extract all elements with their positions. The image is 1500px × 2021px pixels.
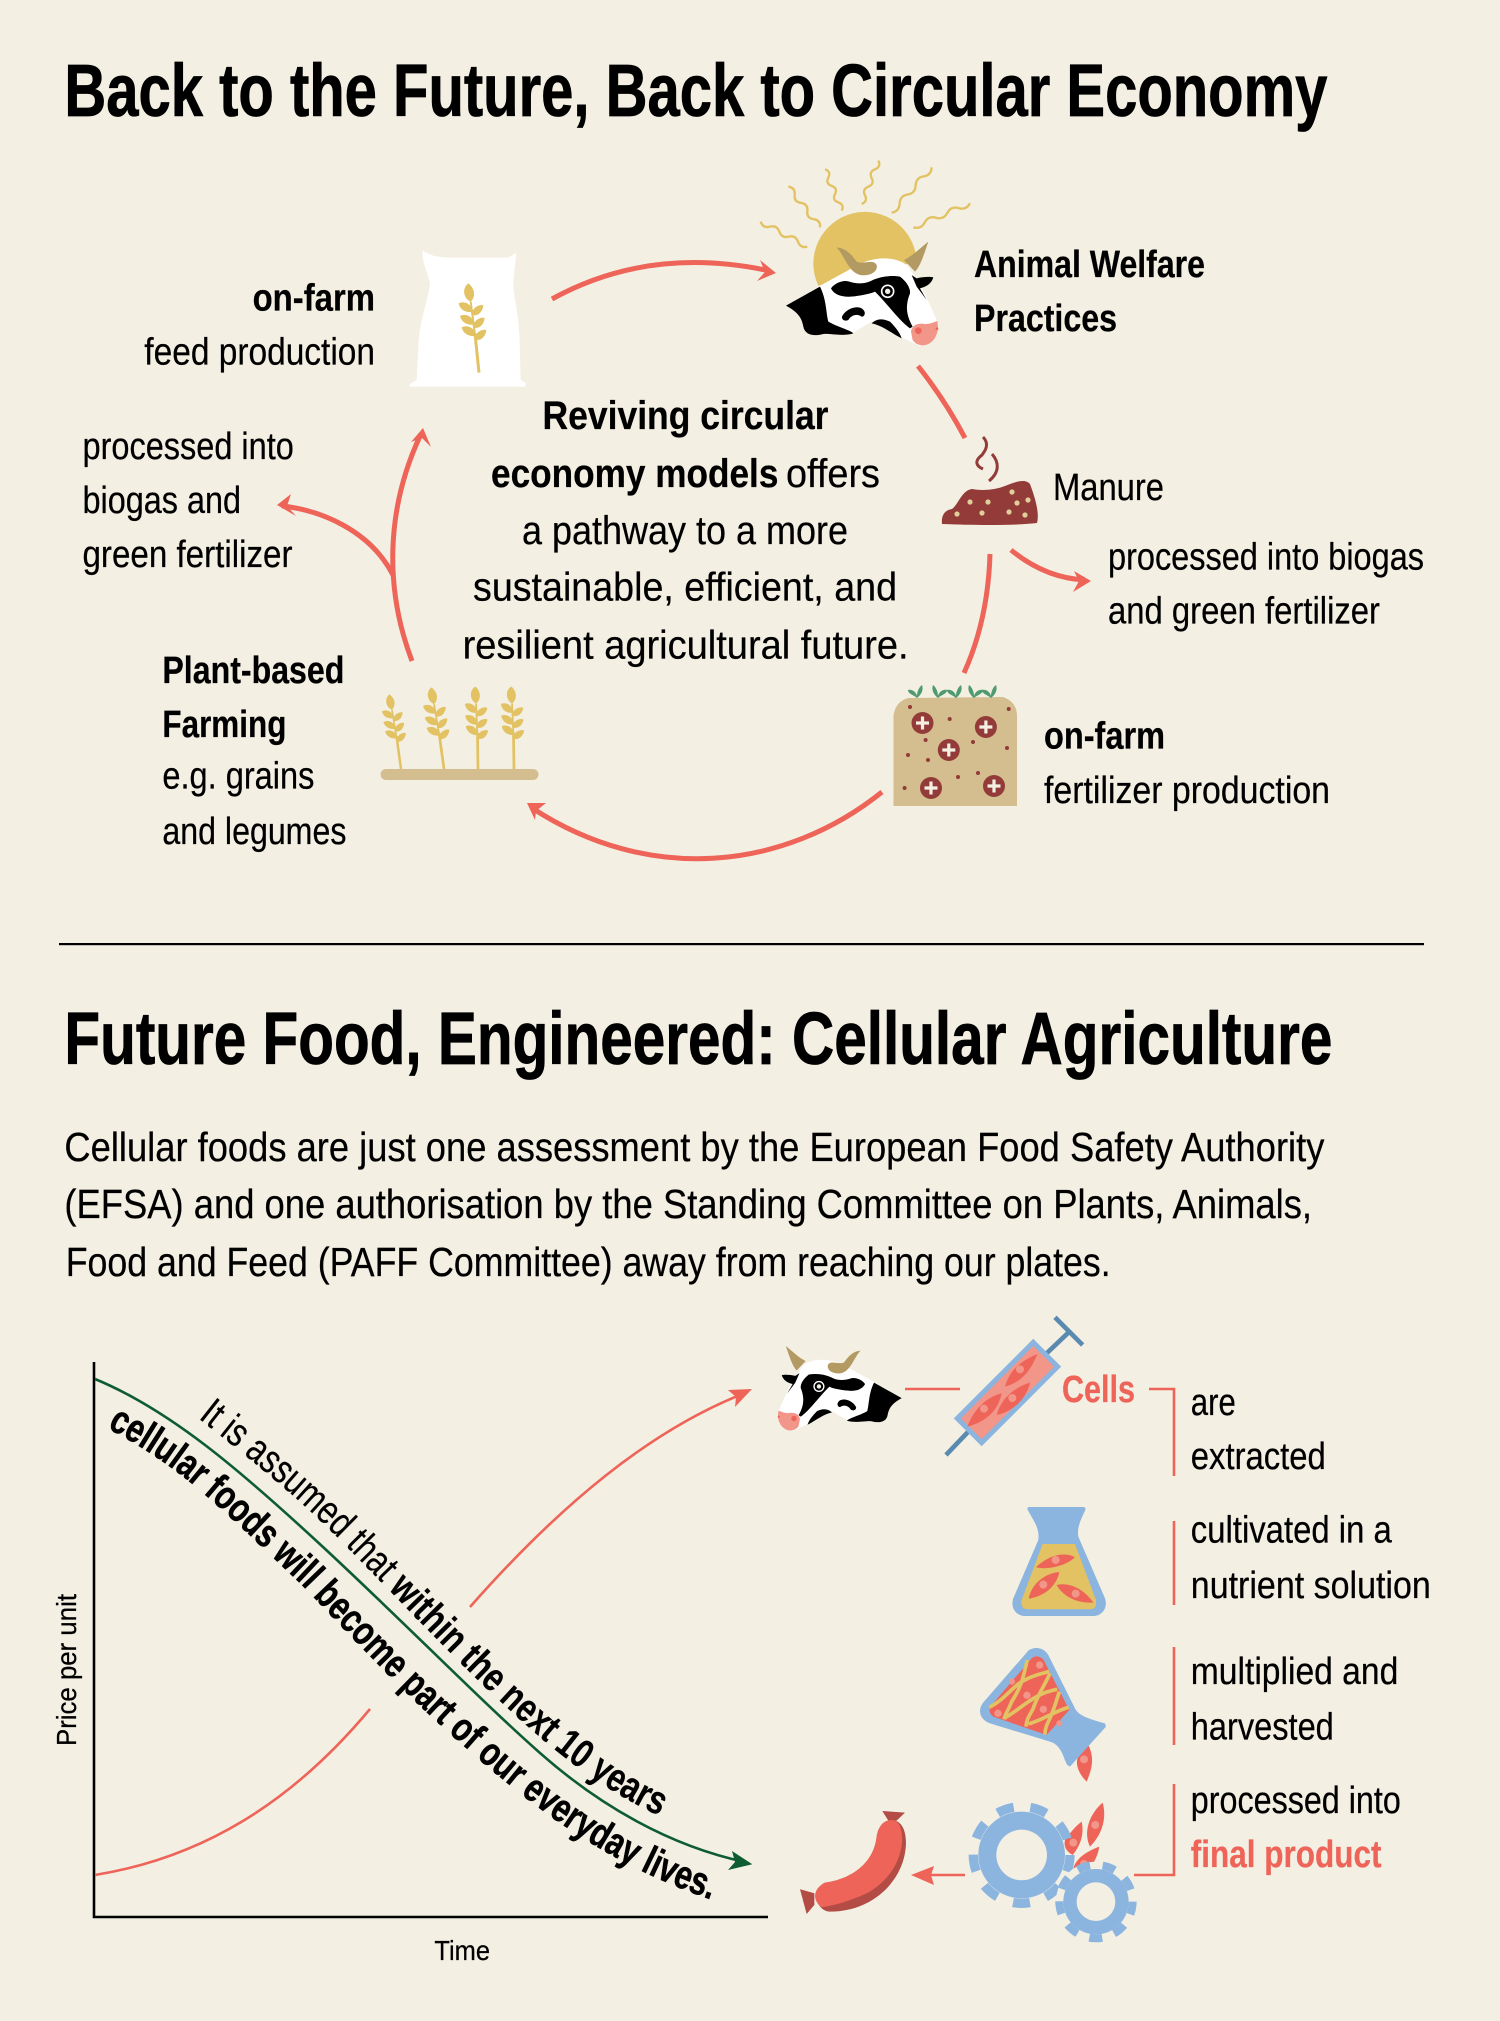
text: processed into biogas and green fertilizer (right) — [1108, 537, 1424, 633]
icon: sausage — [800, 1811, 906, 1914]
icon: tipped flask pouring cells — [980, 1648, 1106, 1782]
icon: syringe with cells — [946, 1317, 1083, 1455]
text: plant-based farming: and legumes — [162, 811, 346, 853]
arrow: manure to biogas — [1011, 550, 1091, 592]
icon: feed sack with wheat — [409, 251, 526, 387]
arrow: sack to cow — [552, 260, 776, 299]
text: animal welfare practices: Practices — [974, 298, 1117, 340]
curve: rising red — [95, 1389, 752, 1875]
text: processed into final product: processed into — [1191, 1780, 1401, 1822]
icon: wheat field — [380, 686, 538, 780]
connector: cow to syringe — [905, 1388, 960, 1390]
arrow: plants to sack — [393, 428, 431, 661]
y axis label: Price per unit — [51, 1594, 82, 1746]
text: plant-based farming: e.g. grains — [162, 756, 314, 798]
panel: circular economy — [64, 49, 1424, 859]
text: processed into biogas and green fertilizer (left): processed into — [82, 426, 294, 468]
bracket: cells extracted — [1149, 1389, 1174, 1476]
text: central message: offers — [786, 452, 880, 496]
text: processed into biogas and green fertilizer (right): processed into biogas — [1108, 537, 1424, 579]
icon: cow under sun — [761, 161, 970, 346]
text: manure: Manure — [1053, 467, 1164, 509]
text: central message — [463, 394, 909, 668]
label: cells: Cells — [1062, 1369, 1135, 1411]
text: on-farm feed production: feed production — [144, 332, 375, 374]
arrow: cow to manure — [918, 366, 965, 438]
arrow: soil to plants — [527, 792, 882, 859]
text: processed into final product — [1191, 1780, 1401, 1876]
text: are extracted: are — [1191, 1382, 1236, 1424]
text: processed into biogas and green fertilizer (right): and green fertilizer — [1108, 591, 1380, 633]
divider: cultivated — [1173, 1521, 1175, 1605]
text: plant-based farming: Plant-based — [162, 650, 344, 692]
text: on-farm feed production: on-farm — [253, 278, 375, 320]
text: on-farm feed production — [144, 278, 375, 374]
text: on-farm fertilizer production — [1044, 716, 1330, 812]
icon: manure — [942, 437, 1038, 525]
text: intro paragraph: Food and Feed (PAFF Committee) away from reaching our plates. — [66, 1239, 1111, 1285]
text: central message: economy models — [491, 452, 778, 496]
text: multiplied and harvested: harvested — [1191, 1707, 1334, 1749]
text: on-farm fertilizer production: on-farm — [1044, 716, 1165, 758]
icon: cow head — [778, 1346, 902, 1431]
text: central message: sustainable, efficient, and — [473, 566, 897, 610]
text: intro paragraph: Cellular foods are just one assessment by the European Food Safety Authority — [64, 1124, 1325, 1170]
x axis label: Time — [434, 1935, 490, 1966]
text: intro paragraph — [64, 1124, 1325, 1285]
text: processed into biogas and green fertilizer (left): green fertilizer — [82, 534, 293, 576]
icon: fertilized soil — [894, 685, 1017, 806]
curved text: cellular foods: cellular foods will become part of our everyday lives. — [110, 1412, 712, 1900]
text: animal welfare practices — [974, 244, 1205, 340]
text: processed into biogas and green fertilizer (left): biogas and — [82, 480, 241, 522]
icon: gears with cells — [973, 1803, 1136, 1942]
chart: price over time — [51, 1362, 768, 1966]
chart axes — [94, 1362, 768, 1917]
icon: flask with cells — [1012, 1507, 1106, 1616]
text: central message: resilient agricultural future. — [463, 624, 909, 668]
arrow: manure to soil — [964, 554, 990, 673]
curved text: within the next 10 years: It is assumed that within the next 10 years — [200, 1398, 666, 1814]
curve: falling green — [95, 1379, 752, 1870]
text: multiplied and harvested — [1191, 1651, 1398, 1749]
text: on-farm fertilizer production: fertilizer production — [1044, 770, 1330, 812]
arrow: plants to biogas — [277, 494, 393, 575]
arrow: gears to sausage — [911, 1866, 965, 1885]
text: cultivated in a nutrient solution: cultivated in a — [1191, 1510, 1393, 1552]
text: central message: a pathway to a more — [522, 509, 848, 553]
text: cultivated in a nutrient solution: nutrient solution — [1191, 1565, 1431, 1607]
bracket: processed — [1134, 1784, 1174, 1875]
divider: multiplied — [1173, 1647, 1175, 1745]
text: cultivated in a nutrient solution — [1191, 1510, 1431, 1607]
text: plant-based farming — [162, 650, 346, 853]
text: plant-based farming: Farming — [162, 704, 286, 746]
panel: cellular agriculture — [51, 997, 1431, 1966]
text: animal welfare practices: Animal Welfare — [974, 244, 1205, 286]
text: processed into biogas and green fertilizer (left) — [82, 426, 294, 576]
text: processed into final product: final product — [1191, 1834, 1382, 1876]
text: intro paragraph: (EFSA) and one authorisation by the Standing Committee on Plants, Animals, — [64, 1181, 1312, 1227]
text: are extracted — [1191, 1382, 1326, 1478]
text: multiplied and harvested: multiplied and — [1191, 1651, 1398, 1693]
text: are extracted: extracted — [1191, 1436, 1326, 1478]
text: central message: Reviving circular — [542, 394, 828, 438]
